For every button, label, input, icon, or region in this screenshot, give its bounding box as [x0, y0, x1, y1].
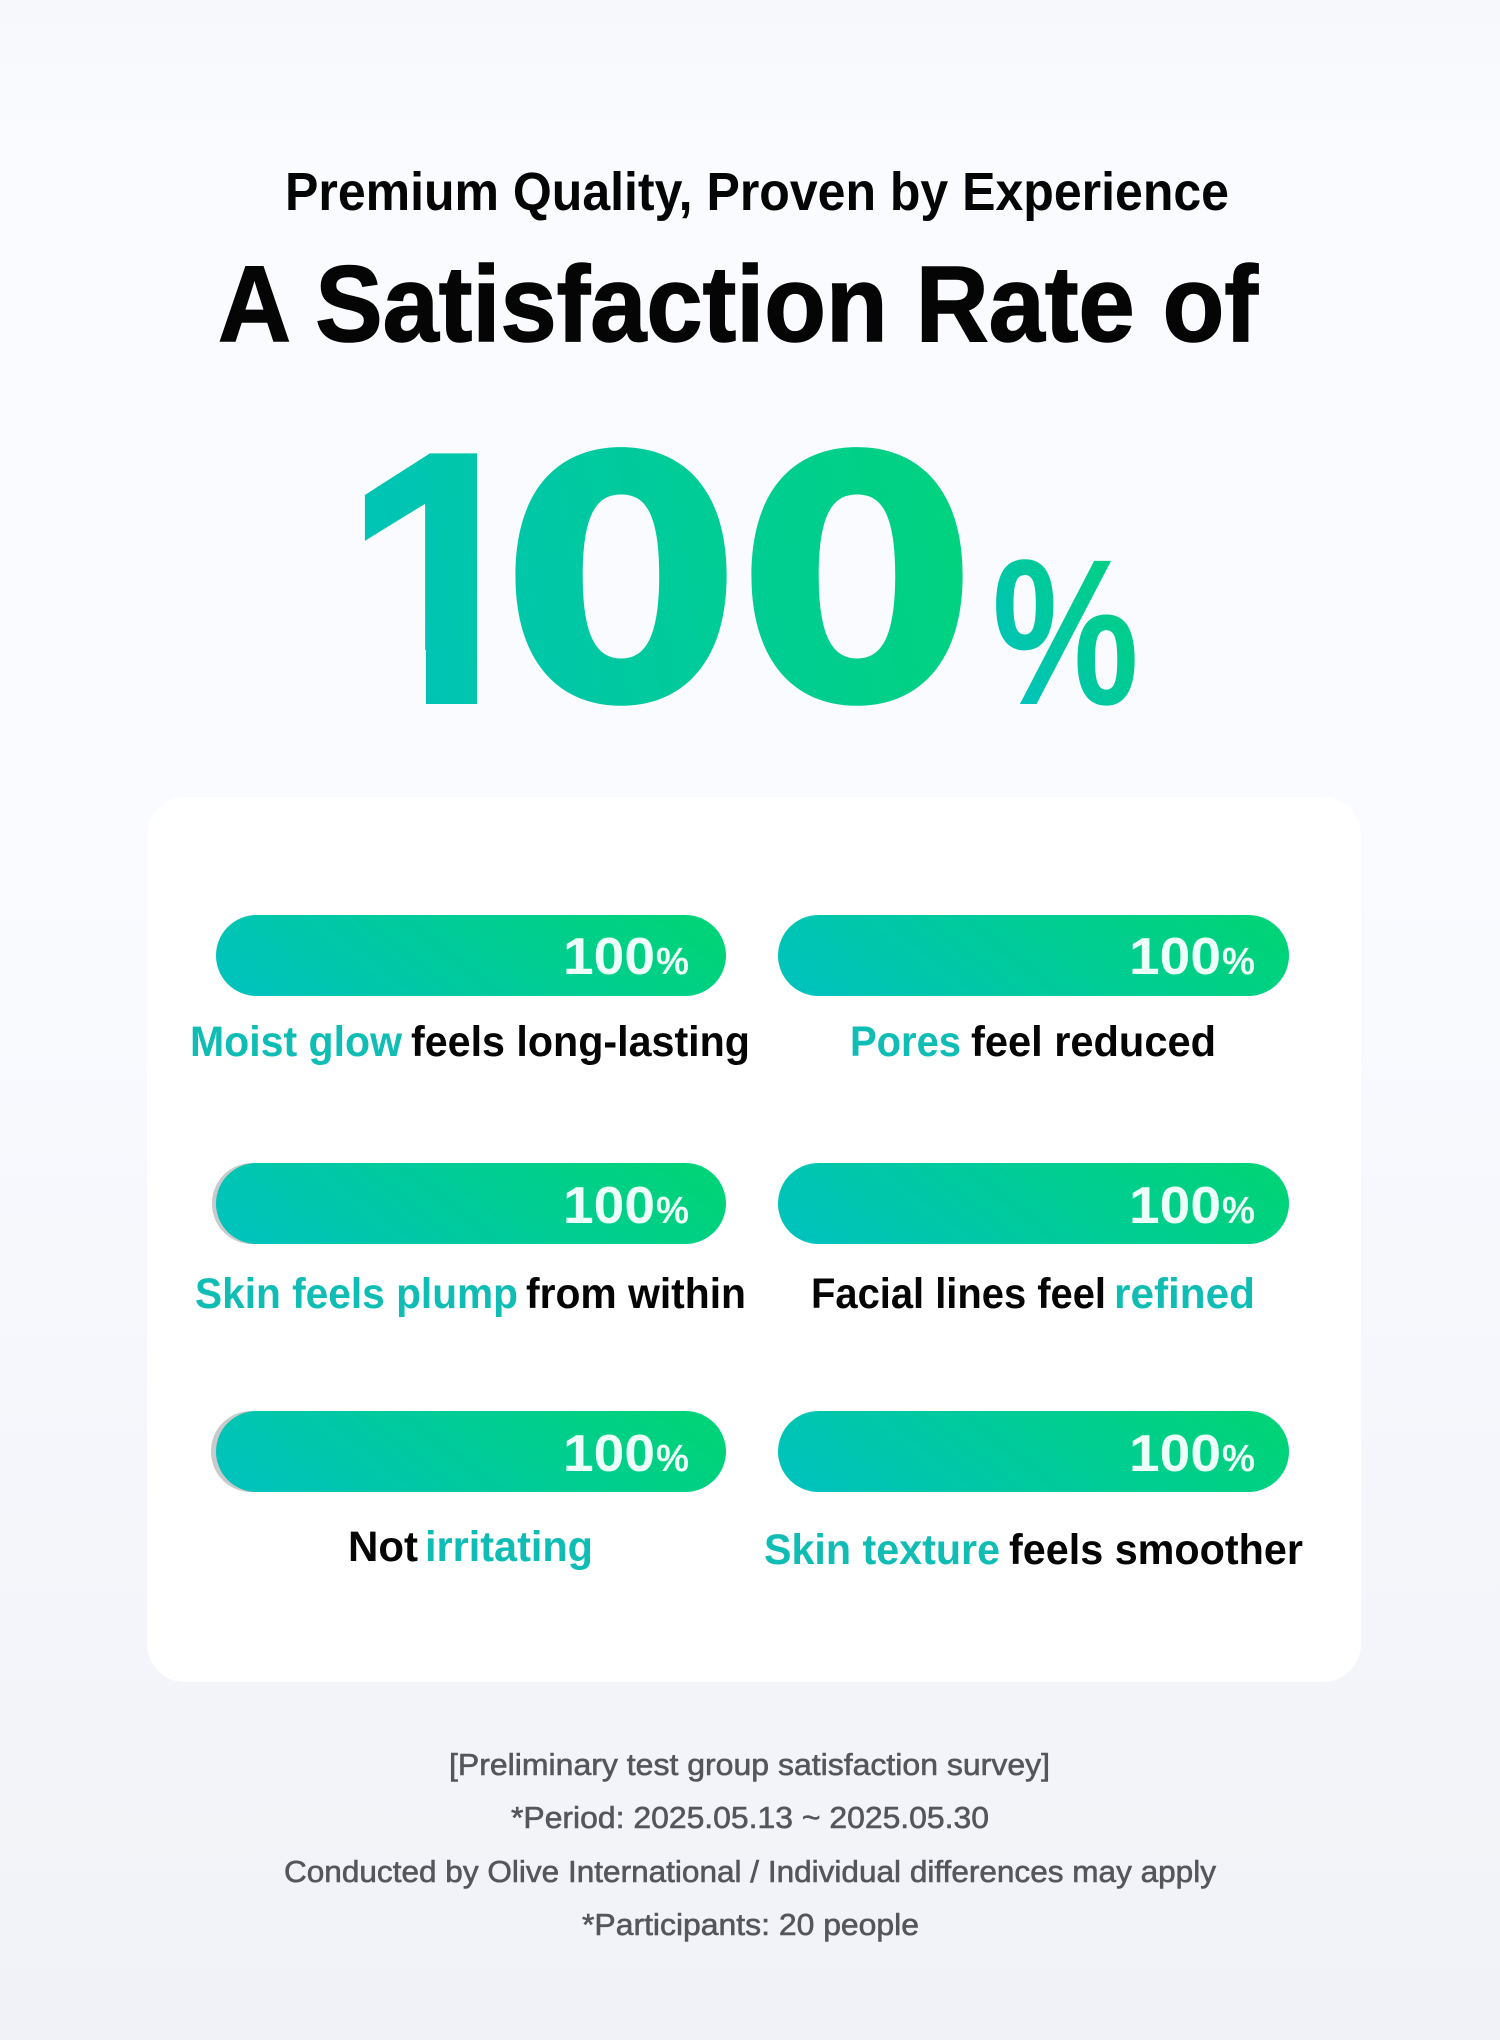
bar: moist glow: %	[656, 941, 689, 983]
bar: facial lines: 100	[1129, 1177, 1221, 1235]
bar: texture: 100	[1129, 1425, 1221, 1483]
bar: pores: %	[1222, 941, 1255, 983]
bar: irritation: %	[656, 1438, 689, 1480]
bar: moist glow: 100	[563, 928, 655, 986]
big number: 100%: 0	[735, 303, 979, 800]
bar: moist glow	[216, 915, 726, 996]
bar: plump: 100	[563, 1177, 655, 1235]
bar: pores	[778, 915, 1289, 996]
big number: 100%: 1	[343, 379, 546, 781]
label: plump: from within	[526, 1270, 746, 1318]
label: moist glow	[190, 1018, 750, 1066]
bar: pores: 100	[1129, 928, 1221, 986]
label: facial lines: Facial lines feel	[811, 1270, 1106, 1318]
label: pores	[850, 1018, 1216, 1066]
panel: satisfaction results	[147, 797, 1361, 1682]
bar: texture: %	[1222, 1438, 1255, 1480]
bar: facial lines: %	[1222, 1190, 1255, 1232]
label: pores: Pores	[850, 1018, 961, 1066]
bar: plump: %	[656, 1190, 689, 1232]
bar: texture	[778, 1411, 1289, 1492]
heading: subtitle: Premium Quality, Proven by Experience	[285, 162, 1229, 222]
label: texture: feels smoother	[1009, 1526, 1303, 1574]
label: moist glow: Moist glow	[190, 1018, 403, 1066]
label: facial lines: refined	[1114, 1270, 1255, 1318]
footnote: survey details: Conducted by Olive International / Individual differences may apply	[284, 1854, 1217, 1889]
footnote: survey details: *Participants: 20 people	[582, 1907, 919, 1942]
heading: main title: A Satisfaction Rate of	[218, 243, 1259, 364]
label: texture: Skin texture	[764, 1526, 1000, 1574]
label: moist glow: feels long-lasting	[411, 1018, 750, 1066]
big number: 100%: 0	[499, 303, 743, 800]
big number: 100%: %	[992, 517, 1139, 749]
label: plump: Skin feels plump	[195, 1270, 518, 1318]
label: irritation	[348, 1523, 593, 1571]
label: pores: feel reduced	[971, 1018, 1216, 1066]
big number: 100%	[364, 447, 1135, 706]
bar: irritation: 100	[563, 1425, 655, 1483]
footnote: survey details: *Period: 2025.05.13 ~ 2025.05.30	[511, 1800, 989, 1835]
label: irritation: irritating	[425, 1523, 593, 1571]
footnote: survey details: [Preliminary test group satisfaction survey]	[449, 1747, 1050, 1782]
label: irritation: Not	[348, 1523, 418, 1571]
bar: plump	[212, 1163, 726, 1244]
bar: facial lines	[778, 1163, 1289, 1244]
bar: irritation	[211, 1411, 726, 1492]
label: plump	[195, 1270, 746, 1318]
footnote: survey details	[284, 1747, 1217, 1942]
label: texture	[764, 1526, 1303, 1574]
